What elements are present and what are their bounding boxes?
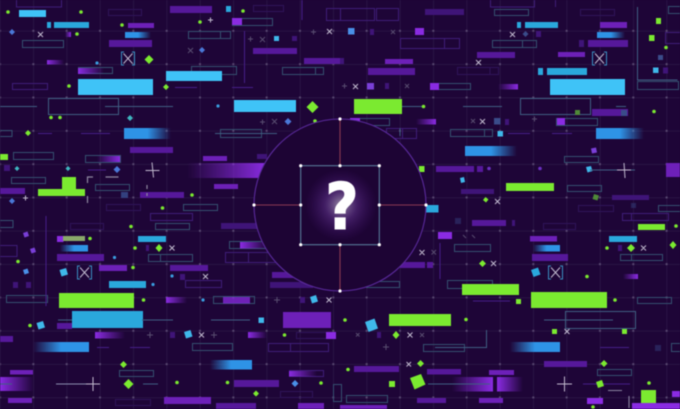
dim grey square [455,203,661,351]
outlined data boxes, upper left [0,18,324,190]
circle [254,119,426,291]
purple fading bars, upper left [47,32,267,178]
bracketed X icon, upper right [592,52,606,65]
blue fading bars, upper left [124,32,171,139]
corner bracket, lower right [608,390,629,408]
green tetris block [38,177,85,196]
dark purple bars, upper left [0,6,340,198]
blue squares, upper right [348,28,354,34]
dark purple bars, lower right [354,220,587,403]
dark purple bars, lower left [0,254,294,409]
large outlined box, upper right [520,98,590,114]
thin lines, upper left [0,106,277,134]
cross marks, upper right [353,32,515,204]
panel: upper-left data blocks [0,0,340,204]
panel: upper-right data blocks [340,0,680,204]
bracketed X icon, lower left [78,266,92,279]
cyan bars, lower left [72,236,166,328]
thin lines, lower right [428,320,613,384]
cross marks, upper left [23,18,332,200]
purple outlined boxes, upper left [12,0,340,90]
question mark: ? [325,170,359,245]
green diamonds, lower left [120,244,259,396]
bright purple bars, lower left [8,265,331,409]
large purple fading block pair [452,377,523,392]
purple squares, lower right [377,220,622,338]
thin lines, upper right [400,7,678,136]
tilted cyan square [365,318,378,332]
outlined data boxes, lower left [0,204,342,402]
large outlined box, lower right [566,312,636,328]
green dots, upper left [8,11,315,195]
dark purple bars, upper right [368,40,628,172]
panel: lower-right data blocks [340,203,680,409]
green side bar [0,154,8,160]
blue dots, lower left [114,258,203,300]
question mark glow [305,169,377,241]
frame nodes [254,119,426,291]
purple squares, lower left [23,232,36,254]
sparkle cross, upper left [146,162,160,178]
purple outlined boxes, upper right [340,0,680,138]
purple fading bar, lower right [623,274,638,279]
blue squares, upper left [226,6,231,12]
large green bar, lower left [59,293,134,308]
bracketed X icon, lower right [548,266,562,279]
cyan bars, lower right [426,205,637,242]
panel: lower-left data blocks [0,204,342,409]
green squares and diamonds, lower right [389,241,676,388]
cyan bars, upper right [550,79,625,95]
sparkle cross, lower right [557,376,572,392]
square frame [301,166,379,245]
cross marks, lower left [170,246,332,338]
green diamonds, upper left [25,55,318,136]
green dots, lower right [345,226,676,407]
purple outlined boxes, lower right [622,214,668,220]
blue fading bars, upper right [465,32,644,156]
blue fading bars, lower left [33,245,252,370]
green dots, lower left [18,208,321,394]
green bar, upper right [506,183,554,191]
purple squares, upper right [367,83,597,154]
large outlined box, upper left [48,98,118,114]
sparkle connector, lower left [56,377,100,391]
cyan bars, upper left [19,10,296,112]
central circle badge [254,119,426,291]
large tilted green square [410,374,426,390]
bright purple bars, lower right [340,236,557,409]
purple outlined boxes, lower left [0,214,328,376]
tilted blue square, lower right [531,268,540,277]
green bars, lower right [389,224,665,403]
sparkle connector, upper right [590,163,635,178]
corner bracket [88,177,147,203]
outlined data boxes, lower right [346,206,680,402]
cross marks, lower right [406,246,646,366]
tilted blue squares, lower left [36,268,318,338]
green bar with connector [354,99,424,114]
outlined data boxes, upper right [350,6,680,192]
grey-green bar [63,236,85,241]
bright purple bars, upper right [385,22,680,177]
green squares, upper right [419,18,661,202]
blue fading bars, lower right [510,245,560,352]
purple fading bars, upper right [416,84,518,124]
bright purple bars, upper left [128,23,238,189]
bracketed X icon, upper left [122,52,134,65]
purple squares, upper left [4,36,297,171]
red crosshair lines [254,119,426,291]
purple fading bars, lower left [0,242,317,391]
thin lines, lower left [0,320,250,384]
